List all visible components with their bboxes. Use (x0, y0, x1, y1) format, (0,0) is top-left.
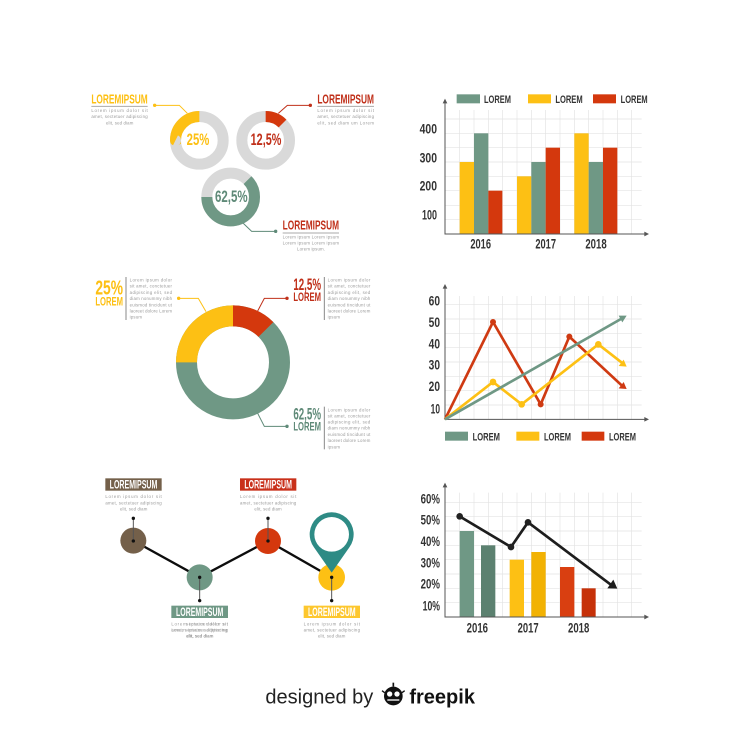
x axis labels: 2016 (470, 236, 491, 252)
y axis labels (420, 120, 437, 223)
footer: freepik credit (265, 683, 476, 708)
yellow line series (445, 341, 627, 419)
callout: red: LOREMIPSUM (317, 91, 374, 106)
y axis labels (421, 490, 440, 614)
panel: large donut (95, 275, 371, 449)
node: green: Lorem ipsum dolor sit (171, 621, 229, 626)
callout: 25%: adipiscing elit, sed (130, 290, 173, 295)
callout: 62,5%: 62,5% (293, 404, 321, 423)
legend: LOREM (473, 432, 500, 444)
node: brown: amet, sectetuer adipiscing (105, 500, 162, 505)
legend (457, 94, 648, 106)
node: brown: Lorem ipsum dolor sit (105, 494, 162, 499)
trend arrow (456, 513, 617, 589)
icon: map pin (310, 512, 354, 573)
node: green (171, 564, 229, 639)
callout: 62,5%: ipsum (328, 444, 340, 449)
callout: 62,5%: LOREM (293, 420, 321, 434)
callout: 62,5%: sit amet, conctetuer (328, 413, 371, 418)
callout: red: amet, sectetuer adipiscing (317, 114, 375, 119)
callout: 12,5%: adipiscing elit, sed (328, 290, 371, 295)
panel: line chart (429, 284, 649, 444)
axes (443, 99, 649, 236)
y axis labels: 30% (421, 554, 440, 570)
callout: red: elit, sed diam um Lorem (317, 120, 374, 125)
callout: 62,5%: diam nonummy nibh (328, 426, 371, 431)
node: green: LOREMIPSUM (176, 605, 223, 619)
node: brown: elit, sed diam (120, 506, 148, 511)
y axis labels (429, 293, 440, 416)
node: yellow: Lorem ipsum dolor sit (304, 621, 361, 626)
node: yellow (304, 564, 361, 639)
node: green: amet, sectetuer adipiscing (171, 628, 229, 633)
y axis labels: 10% (423, 598, 440, 614)
callout: 12,5%: LOREM (293, 290, 321, 304)
panel: grouped bar chart (420, 94, 649, 252)
bars (460, 531, 596, 617)
callout: 12,5%: euismod tincidunt ut (328, 302, 371, 307)
legend: LOREM (484, 94, 511, 106)
y axis labels: 30 (429, 357, 440, 373)
callout: 62,5%: adipiscing elit, sed (328, 420, 371, 425)
node: green: elit, sed diam (187, 634, 214, 639)
node: red: amet, sectetuer adipiscing (240, 500, 297, 505)
x axis labels: 2018 (568, 620, 589, 636)
red line series (445, 319, 627, 419)
connecting line (133, 541, 332, 577)
callout: 12,5%: diam nonummy nibh (328, 296, 371, 301)
node: red: elit, sed diam (254, 506, 282, 511)
panel: percentage bar chart with trend (421, 483, 649, 636)
y axis labels: 20 (429, 378, 440, 394)
callout: yellow: Lorem ipsum dolor sit (91, 108, 148, 113)
node: red: Lorem ipsum dolor sit (240, 494, 297, 499)
y axis labels: 200 (420, 178, 437, 194)
callout: yellow: LOREMIPSUM (91, 91, 148, 106)
y axis labels: 60 (429, 293, 440, 309)
callout: 25% (95, 276, 206, 320)
node: red: LOREMIPSUM (244, 478, 292, 492)
callout: 25%: LOREM (95, 294, 123, 308)
callout: 25%: ipsum (130, 315, 142, 320)
panel: timeline (105, 478, 361, 639)
legend: LOREM (544, 432, 571, 444)
callout: green: LOREMIPSUM (283, 217, 339, 232)
y axis labels: 40 (429, 335, 440, 351)
icon: freepik mascot (382, 683, 405, 705)
bars (460, 133, 617, 234)
callout: green: Lorem ipsum Lorem ipsum (283, 241, 339, 246)
callout: 12,5%: Lorem ipsum dolor (328, 278, 371, 283)
node: yellow: elit, sed diam (318, 634, 346, 639)
node: brown (105, 478, 162, 554)
x axis labels: 2017 (535, 236, 556, 252)
donut: 12,5%: 12,5% (251, 130, 281, 149)
credit text: designed by (265, 686, 373, 708)
legend: LOREM (609, 432, 636, 444)
callout: green: Lorem ipsum. (297, 247, 325, 252)
donut: 62,5%: 62,5% (215, 187, 248, 206)
callout: 25%: sit amet, conctetuer (130, 284, 173, 289)
callout: 12,5%: laoreet dolore Lorem (328, 308, 371, 313)
callout: 25%: diam nonummy nibh (130, 296, 173, 301)
callout: 25%: laoreet dolore Lorem (130, 308, 172, 313)
callout: 12,5%: sit amet, conctetuer (328, 284, 371, 289)
node: brown: LOREMIPSUM (110, 478, 157, 492)
donut: 25%: 25% (187, 130, 209, 149)
y axis labels: 40% (421, 533, 440, 549)
node: yellow: LOREMIPSUM (308, 605, 356, 619)
y axis labels: 400 (420, 120, 437, 136)
node: green: Lorem ipsum adipiscing (171, 628, 228, 633)
x axis labels: 2017 (518, 620, 539, 636)
axes (443, 284, 649, 422)
callout: yellow: amet, sectetuer adipiscing (91, 114, 148, 119)
x axis labels (467, 620, 589, 636)
donut: 12,5% (242, 116, 289, 164)
donut chart (186, 316, 279, 409)
legend: LOREM (621, 94, 648, 106)
x axis labels (470, 236, 607, 252)
legend: LOREM (555, 94, 583, 106)
callout: 62,5%: laoreet dolore Lorem (328, 438, 371, 443)
callout: 62,5%: euismod tincidunt ut (328, 432, 371, 437)
panel: three small donuts (91, 91, 375, 252)
callout: yellow: elit, sed diam (106, 120, 134, 125)
donut: 25% (175, 116, 223, 164)
y axis labels: 10 (431, 400, 440, 416)
callout: 62,5% (258, 404, 371, 449)
callout: 25%: Lorem ipsum dolor (130, 278, 173, 283)
callout: yellow (91, 91, 187, 125)
callout: 25%: 25% (95, 276, 123, 299)
wordmark: freepik (409, 686, 476, 708)
donut: 62,5% (197, 163, 264, 231)
y axis labels: 50% (421, 512, 440, 528)
callout: 12,5%: 12,5% (293, 275, 321, 294)
y axis labels: 300 (420, 149, 437, 165)
yellow node connector (330, 576, 333, 602)
x axis labels: 2018 (585, 236, 607, 252)
node: yellow: amet, sectetuer adipiscing (304, 628, 361, 633)
callout: 12,5%: ipsum (328, 315, 340, 320)
node: red (240, 478, 297, 554)
callout: red (278, 91, 375, 125)
callout: 12,5% (258, 275, 371, 320)
node: green: sectetuer dolor sit (186, 621, 229, 626)
callout: green (243, 217, 339, 252)
axes (443, 483, 649, 619)
callout: 62,5%: Lorem ipsum dolor (328, 407, 371, 412)
legend (445, 432, 636, 444)
node: green: elit, sed diam (186, 634, 214, 639)
y axis labels: 50 (429, 314, 440, 330)
callout: red: Lorem ipsum dolor sit (317, 108, 375, 113)
callout: green: Lorem ipsum Lorem ipsum (283, 234, 339, 239)
green line series (445, 316, 627, 419)
callout: 25%: euismod tincidunt ut (130, 302, 173, 307)
y axis labels: 100 (422, 207, 437, 223)
y axis labels: 20% (421, 576, 440, 592)
y axis labels: 60% (421, 490, 440, 506)
x axis labels: 2016 (467, 620, 488, 636)
